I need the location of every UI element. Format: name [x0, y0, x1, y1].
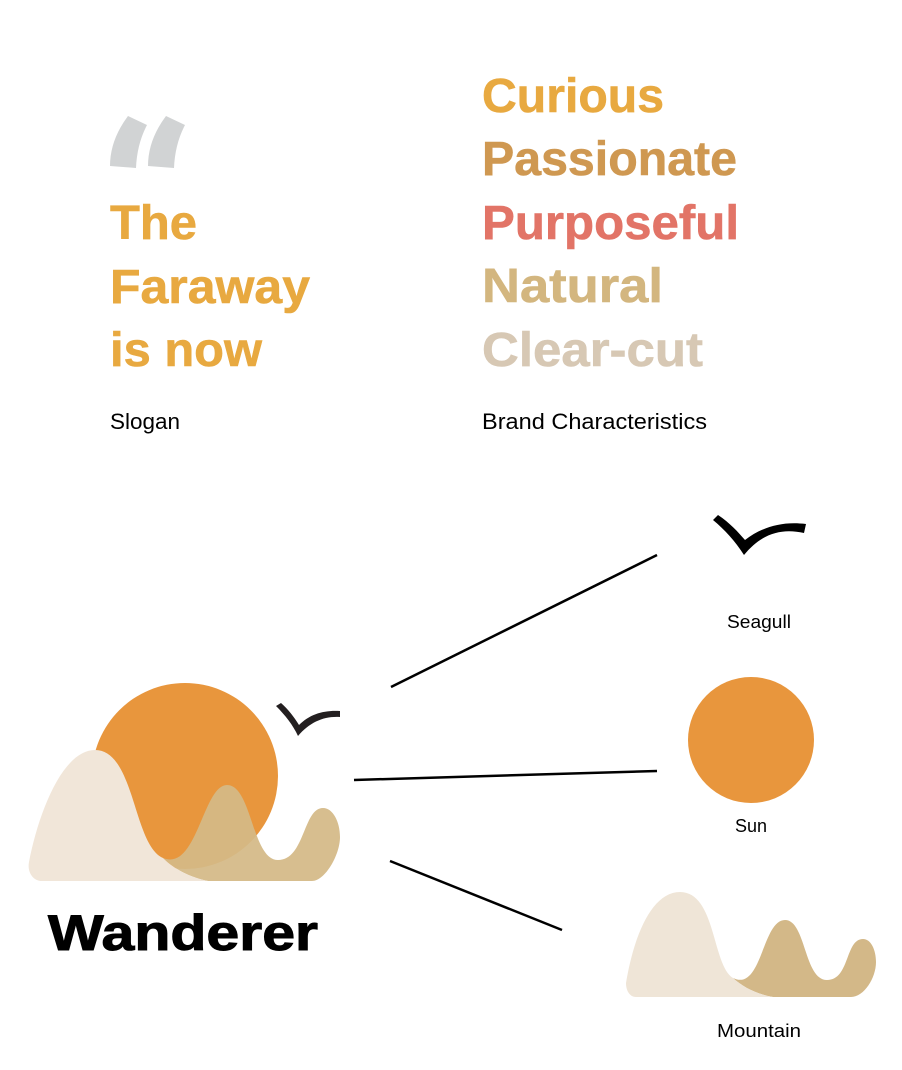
logo: tan mountain [163, 785, 340, 881]
icon: seagull [713, 515, 806, 555]
slogan heading [110, 197, 310, 377]
slogan heading: Faraway [110, 261, 310, 314]
logo: seagull [276, 703, 340, 736]
logo: sun [92, 683, 278, 869]
panel: Wanderer logo [29, 683, 340, 961]
characteristics word list: Clear-cut [482, 324, 703, 377]
slogan caption: Slogan [110, 409, 180, 434]
characteristics word list [482, 70, 739, 377]
component: seagull [713, 515, 806, 632]
sun label: Sun [735, 816, 767, 836]
panel: brand characteristics [482, 70, 739, 434]
slogan heading: The [110, 197, 197, 250]
characteristics word list: Purposeful [482, 197, 739, 250]
component: sun [688, 677, 814, 836]
characteristics word list: Passionate [482, 133, 737, 186]
mountain label: Mountain [717, 1021, 801, 1041]
logo: pale mountain [29, 750, 208, 881]
icon: quotation mark [110, 116, 185, 168]
icon: sun [688, 677, 814, 803]
slogan heading: is now [110, 324, 263, 377]
logo wordmark: Wanderer [48, 905, 318, 961]
characteristics word list: Natural [482, 260, 663, 313]
icon: tan mountain [733, 920, 876, 997]
seagull label: Seagull [727, 612, 791, 632]
component: mountain [626, 892, 876, 1041]
characteristics word list: Curious [482, 70, 664, 123]
characteristics caption: Brand Characteristics [482, 409, 707, 434]
icon: pale mountain [626, 892, 773, 997]
connector lines [354, 555, 657, 930]
panel: slogan [110, 116, 310, 434]
